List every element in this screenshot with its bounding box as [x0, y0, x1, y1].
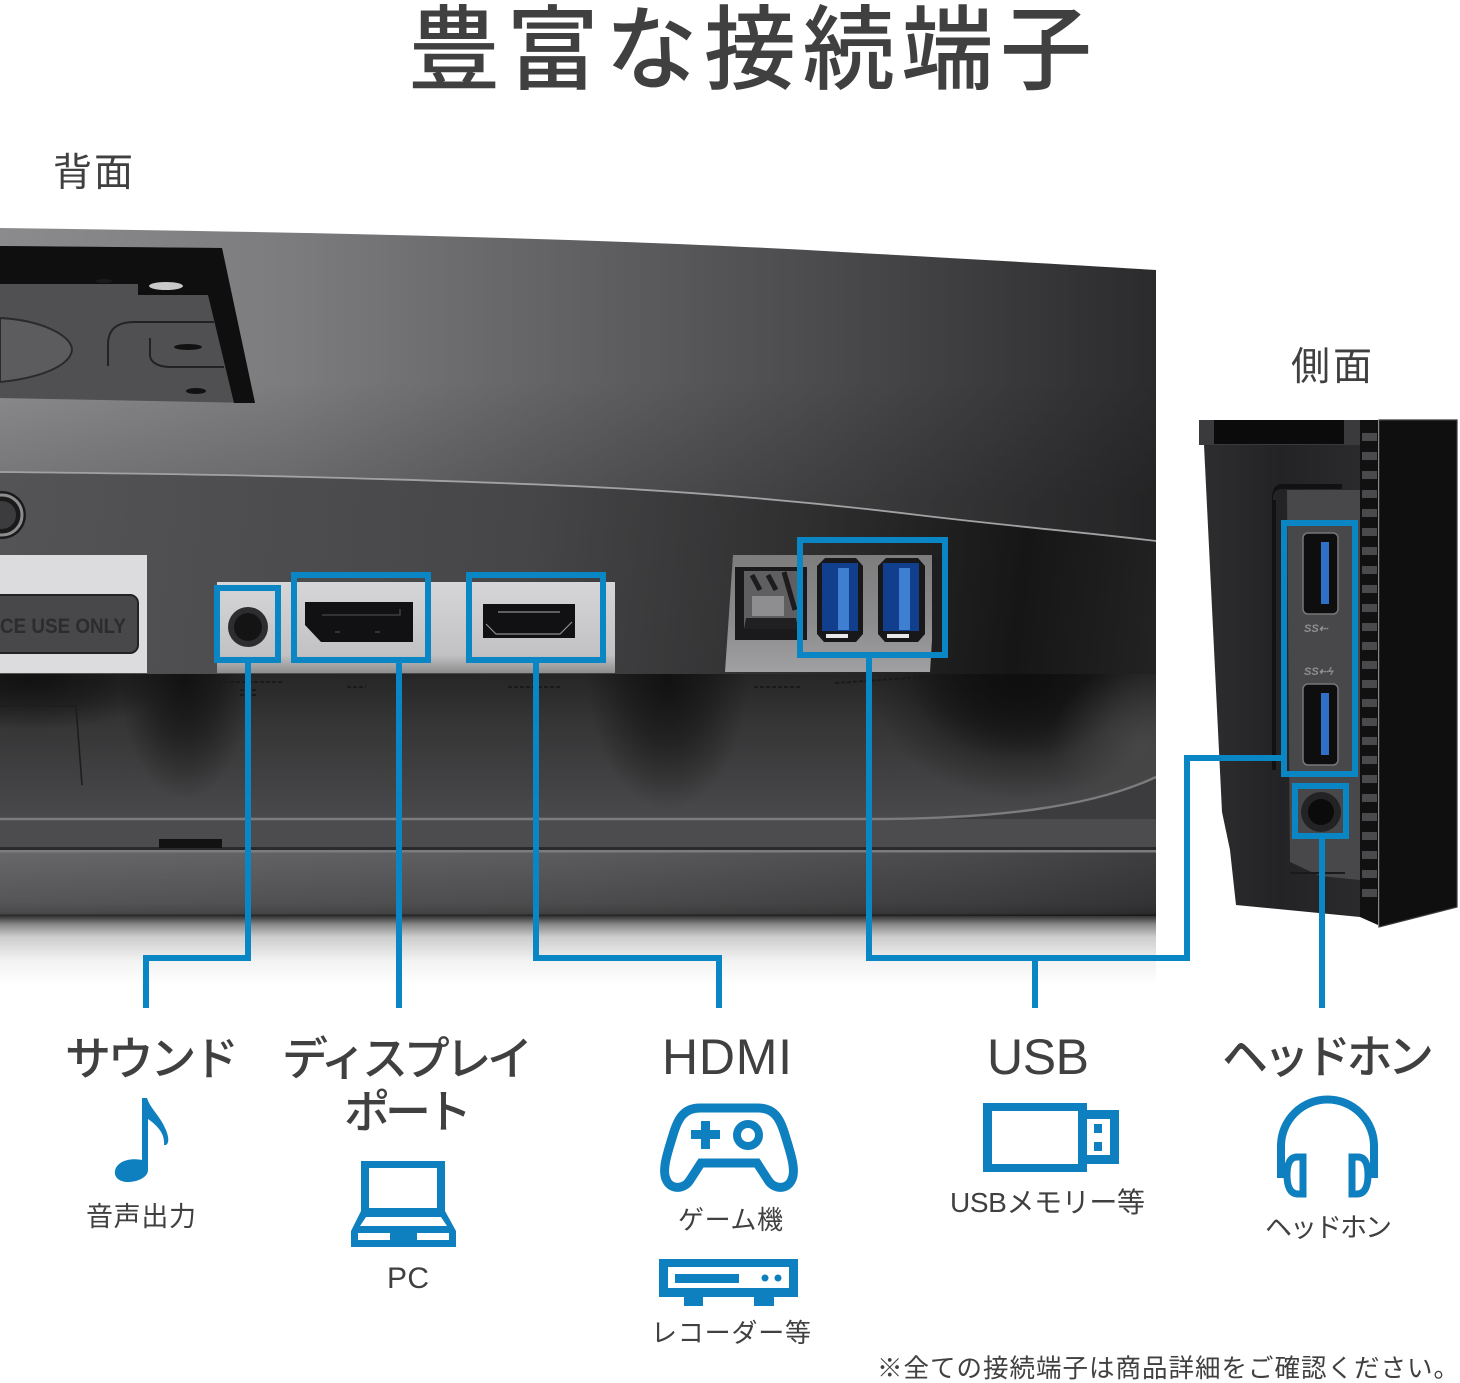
silver port strip: audio, DP, HDMI	[217, 582, 615, 673]
sublabel: USB memory: USBメモリー等	[950, 1187, 1145, 1218]
side headphone jack	[1301, 792, 1341, 832]
sublabel: recorder: レコーダー等	[651, 1313, 811, 1350]
sublabel: game console: ゲーム機	[678, 1200, 783, 1237]
sublabel: audio output: 音声出力	[86, 1195, 196, 1234]
heading: HDMI: HDMI	[662, 1029, 792, 1085]
heading: headphones: ヘッドホン	[1222, 1021, 1434, 1087]
label: rear: 背面	[53, 142, 133, 198]
heading: sound: サウンド	[65, 1023, 239, 1089]
SS logo upper: SS⇠	[1304, 623, 1329, 635]
sublabel: headphones: ヘッドホン	[1265, 1206, 1392, 1245]
connector: HDMI highlight and line	[469, 575, 719, 1008]
column: headphones	[1222, 1021, 1434, 1245]
column: sound	[65, 1023, 239, 1234]
connector: DisplayPort highlight and line	[294, 575, 428, 1008]
side USB port 1	[1303, 533, 1338, 614]
heading: USB: USB	[987, 1029, 1089, 1085]
connector: headphone highlight and line	[1295, 786, 1346, 1008]
heading: display port: ディスプレイ	[282, 1023, 533, 1089]
label: side: 側面	[1291, 336, 1372, 392]
HDMI connector	[483, 604, 575, 638]
label marks below ports	[218, 677, 925, 695]
service label: CE USE ONLY	[0, 615, 126, 638]
heading: display port second line: ポート	[344, 1076, 472, 1142]
column: display port	[282, 1023, 533, 1295]
icon: headphones	[1281, 1100, 1374, 1194]
icon: game controller	[665, 1108, 793, 1187]
upstream USB port	[735, 567, 807, 640]
side USB port 2	[1303, 684, 1338, 765]
panel: monitor side photo	[1199, 420, 1457, 927]
DisplayPort connector	[305, 602, 413, 642]
audio jack	[228, 607, 268, 647]
screw	[0, 491, 26, 539]
sublabel: PC: PC	[387, 1262, 429, 1295]
icon: music note	[115, 1098, 168, 1182]
column: HDMI	[651, 1029, 811, 1350]
connector: USB highlights and lines	[800, 523, 1355, 1008]
service label	[0, 555, 147, 673]
icon: recorder	[659, 1259, 798, 1306]
connector: sound highlight and line	[146, 588, 278, 1008]
icon: laptop	[351, 1161, 456, 1247]
silver port strip: USB	[725, 555, 944, 672]
port panel	[1272, 484, 1360, 880]
USB port 1	[817, 558, 863, 642]
USB port 2	[878, 558, 925, 642]
SS logo lower: SS⇠ϟ	[1304, 666, 1334, 678]
mount recess	[0, 246, 255, 403]
icon: USB stick	[983, 1103, 1119, 1172]
panel: monitor rear photo	[0, 228, 1230, 986]
column: USB	[950, 1029, 1145, 1218]
vent stripes	[1362, 437, 1377, 893]
